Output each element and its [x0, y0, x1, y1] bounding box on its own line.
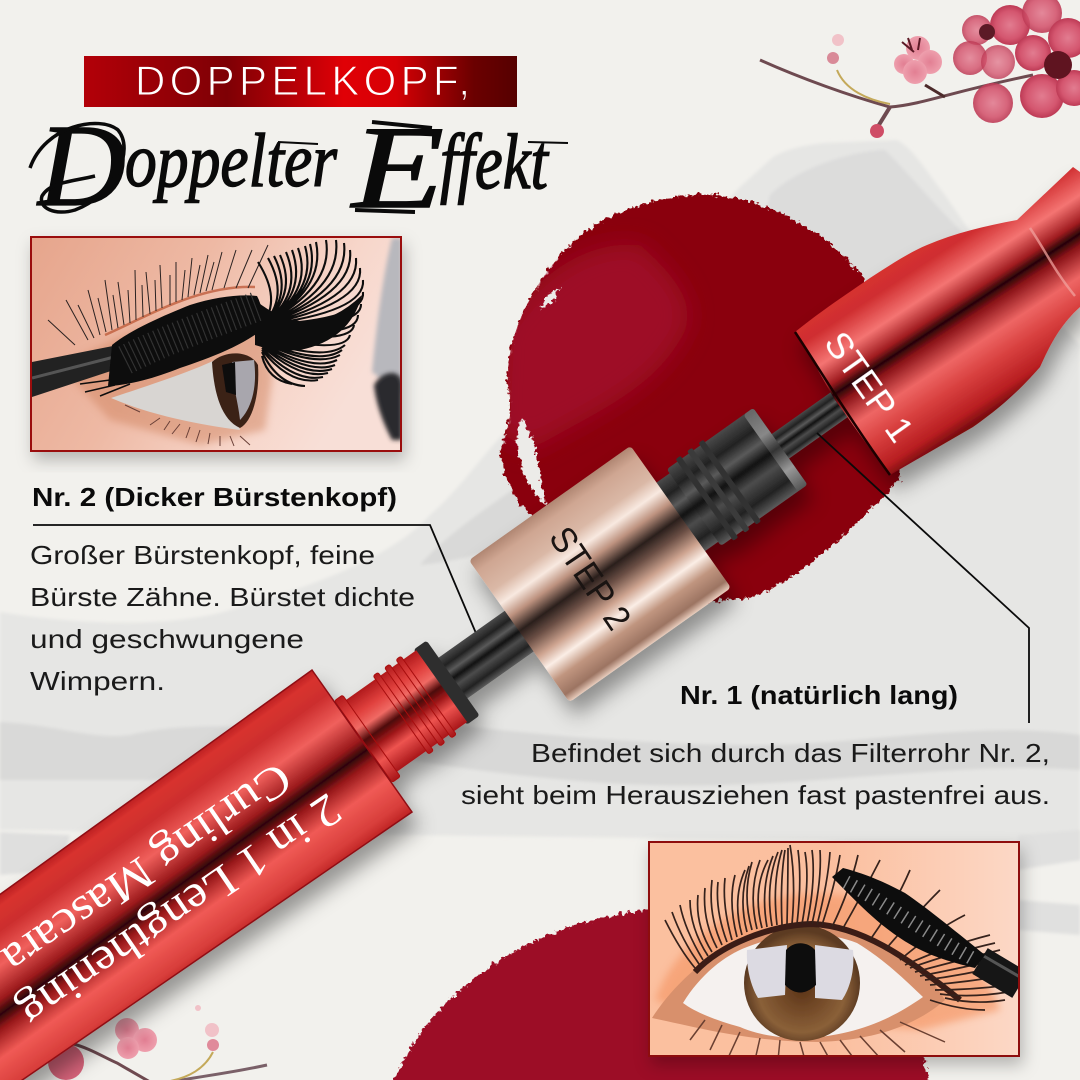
script title: oppelter	[125, 119, 337, 203]
mascara wand	[980, 961, 1020, 985]
leader line: Nr. 2	[33, 525, 481, 645]
reflections	[747, 945, 787, 998]
centre parts along axis	[313, 324, 903, 813]
mascara brush	[832, 868, 985, 968]
photo: eye front view	[649, 842, 1020, 1060]
tube print: product name: Curling Mascara	[0, 753, 301, 986]
lower lashes	[690, 1020, 946, 1055]
script title: D	[36, 100, 126, 231]
callout: Nr. 1 text: Befindet sich durch das Filterrohr Nr. 2,	[531, 738, 1050, 768]
red lower tube	[0, 670, 412, 1080]
eye white	[111, 360, 240, 430]
callout: Nr. 2 text	[30, 540, 415, 696]
fanned lashes	[258, 240, 363, 386]
lower rod	[435, 608, 537, 701]
lower lashes	[125, 405, 250, 446]
photo: lashes side view	[31, 237, 402, 451]
callout: Nr. 2 heading: Nr. 2 (Dicker Bürstenkopf)	[32, 482, 397, 512]
upper lid line	[695, 924, 960, 1000]
ink blot: centre red	[495, 194, 900, 640]
blossom branch: bottom left	[48, 1005, 267, 1080]
red upper tube	[795, 167, 1080, 475]
mascara brush	[108, 295, 268, 386]
ink blot: bottom red	[392, 908, 930, 1080]
orange eye shadow	[655, 894, 1000, 1030]
wand rod	[32, 346, 112, 397]
upper rod	[767, 383, 862, 462]
callout: Nr. 1 heading: Nr. 1 (natürlich lang)	[680, 680, 958, 710]
title banner: DOPPELKOPF,	[135, 57, 470, 104]
callout: Nr. 1 text: sieht beim Herausziehen fast pastenfrei aus.	[461, 780, 1050, 810]
pupil	[785, 943, 816, 992]
script title: E	[349, 102, 444, 233]
iris	[744, 925, 860, 1041]
red threaded neck	[334, 645, 471, 782]
black threaded neck	[649, 405, 809, 560]
flowers	[827, 0, 1080, 138]
callout: Nr. 1 text	[461, 738, 1050, 810]
label: STEP 2: STEP 2	[541, 519, 640, 637]
grey ink wash landscape	[0, 140, 1080, 935]
iris	[212, 353, 258, 428]
script title: ffekt	[440, 118, 550, 205]
crease	[105, 287, 255, 335]
callout: Nr. 2 text: und geschwungene	[30, 624, 304, 654]
callout: Nr. 2 text: Großer Bürstenkopf, feine	[30, 540, 375, 570]
callout: Nr. 2 text: Wimpern.	[30, 666, 165, 696]
script title	[30, 100, 568, 233]
blossom branch: top right	[760, 0, 1080, 138]
upper lashes	[665, 845, 1010, 1010]
callout: Nr. 2 text: Bürste Zähne. Bürstet dichte	[30, 582, 415, 612]
label: STEP 1: STEP 1	[816, 324, 922, 450]
rose gold cap	[469, 446, 731, 702]
leader line: Nr. 1	[817, 433, 1029, 723]
lid	[652, 922, 945, 1042]
upper lashes	[48, 245, 268, 345]
eye white	[683, 934, 923, 1038]
tube print: product name: 2 in 1 Lengthening	[10, 784, 351, 1038]
temple background	[372, 238, 402, 395]
